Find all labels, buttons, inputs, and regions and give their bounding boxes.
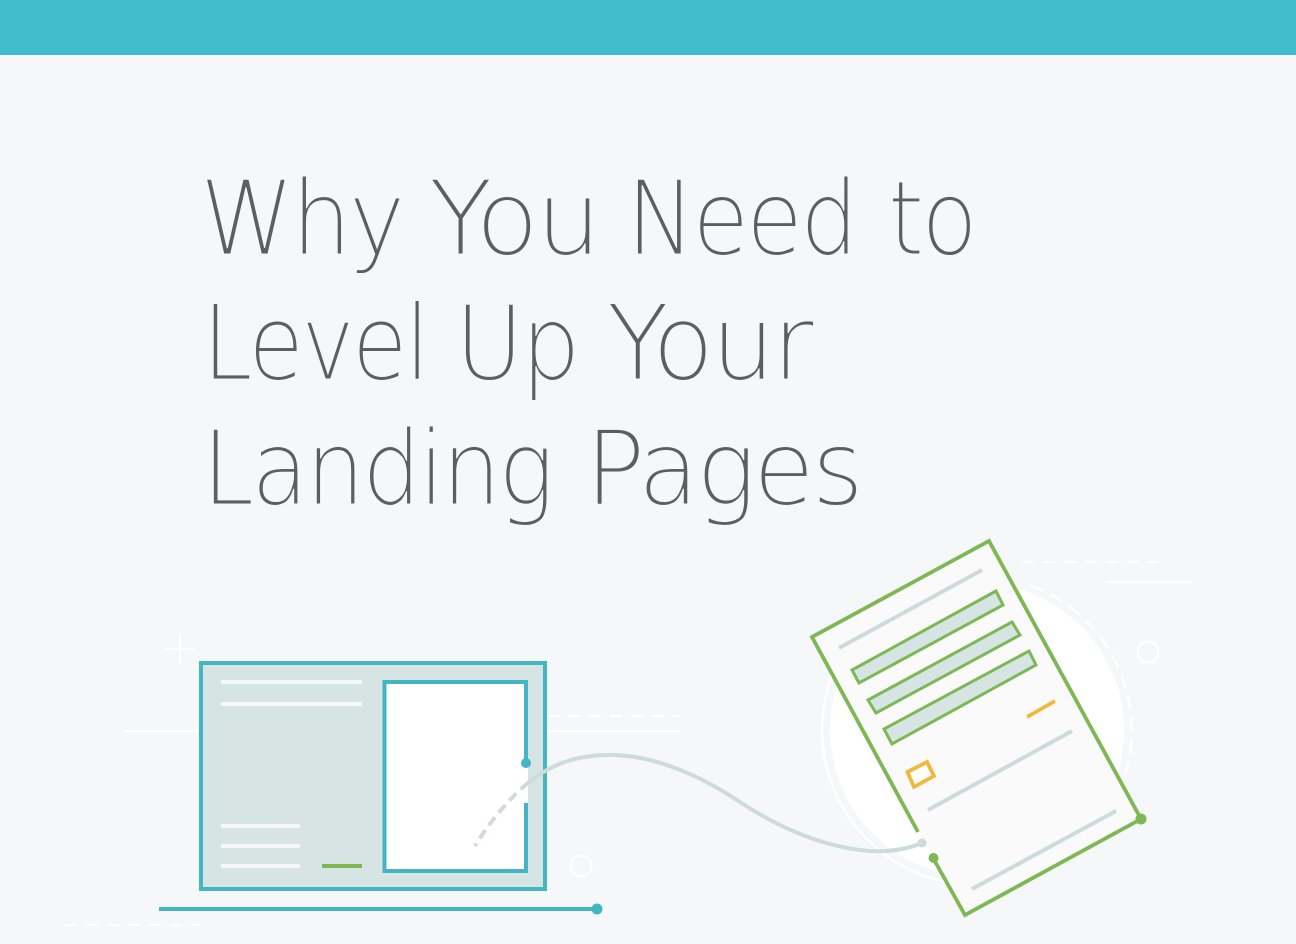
title line 1 <box>200 159 975 279</box>
decorative background disc and ring, right <box>822 562 1192 885</box>
title line 1: Why <box>200 159 402 279</box>
baseline under page <box>159 904 602 914</box>
landing page wireframe <box>201 663 545 889</box>
sheet outline <box>812 541 1141 915</box>
title line 1: You <box>429 159 599 279</box>
title line 2 <box>202 283 814 404</box>
form box <box>384 682 526 871</box>
title line 1: to <box>888 159 975 279</box>
document sheet <box>812 540 1146 916</box>
page panel <box>201 663 545 889</box>
title line 3 <box>202 409 861 529</box>
top banner <box>0 0 1296 55</box>
body text lines <box>221 826 300 866</box>
header text lines <box>221 682 362 704</box>
title line 3: Landing <box>202 410 552 529</box>
gap in form box edge <box>524 764 528 803</box>
form box connector dot <box>521 758 531 768</box>
form field bars <box>852 591 1036 744</box>
yellow dash <box>1027 701 1055 717</box>
title line 1: Need <box>626 159 856 279</box>
decorative background marks, left <box>65 634 680 925</box>
yellow checkbox <box>908 762 934 787</box>
title line 2: Your <box>607 284 814 404</box>
connector curve from page to document <box>475 755 926 851</box>
sheet fill <box>812 540 1142 916</box>
sheet corner dots <box>1136 814 1146 824</box>
title <box>200 159 975 529</box>
title line 2: Up <box>455 285 578 404</box>
grey text lines <box>839 570 1116 889</box>
title line 2: Level <box>202 283 427 403</box>
green button <box>322 864 362 868</box>
title line 3: Pages <box>585 409 861 528</box>
